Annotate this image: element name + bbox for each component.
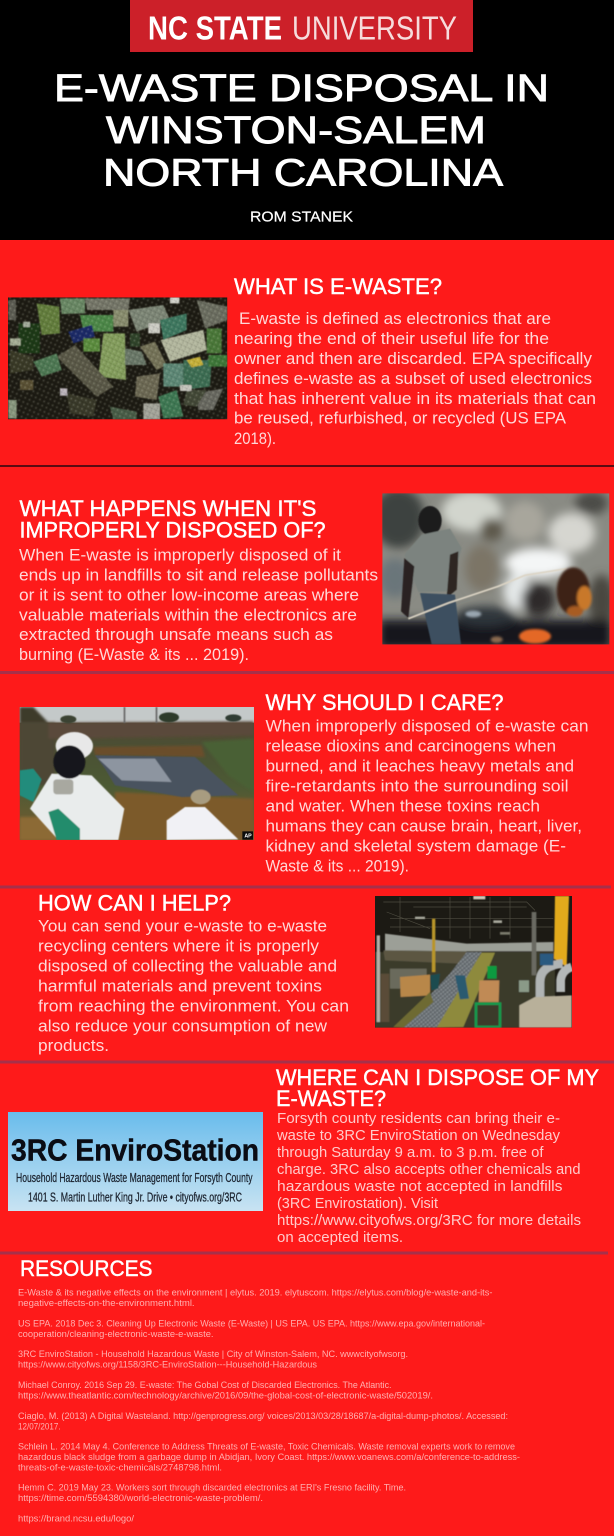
body text: also reduce your consumption of new: [38, 1018, 327, 1036]
body text: nearing the end of their useful life for the: [234, 330, 549, 348]
reference list: https://www.cityofws.org/1158/3RC-EnviroStation---Household-Hazardous: [18, 1358, 317, 1370]
body text: and water. When these toxins reach: [266, 798, 540, 816]
body text: humans they can cause brain, heart, liver,: [266, 818, 582, 836]
reference list: threats-of-e-waste-toxic-chemicals/2748798.html.: [18, 1462, 222, 1472]
body text: Forsyth county residents can bring their e-: [277, 1110, 560, 1127]
body text: that has inherent value in its materials that can: [234, 390, 596, 408]
panel: improper disposal: [19, 488, 614, 664]
logo: NC State University: UNIVERSITY: [292, 10, 457, 46]
panel: what is e-waste: [8, 274, 596, 448]
body text: You can send your e-waste to e-waste: [38, 918, 327, 936]
heading: WHERE CAN I DISPOSE OF MY: [276, 1065, 599, 1090]
image: 3RC EnviroStation sign: 3RC EnviroStation: [11, 1132, 259, 1168]
image: 3RC EnviroStation sign: Household Hazardous Waste Management for Forsyth County: [16, 1171, 253, 1185]
photo: workers in protective suits by polluted pond: [20, 707, 254, 840]
body text: charge. 3RC also accepts other chemicals and: [277, 1161, 580, 1178]
body text: ends up in landfills to sit and release pollutants: [19, 567, 378, 585]
panel: how can I help: [38, 891, 572, 1055]
panel: why should I care: [20, 690, 588, 876]
body text: be reused, refurbished, or recycled (US EPA: [234, 410, 566, 428]
body text: https://www.cityofws.org/3RC for more details: [277, 1212, 581, 1229]
body text: or it is sent to other low-income areas where: [19, 586, 359, 604]
body text: disposed of collecting the valuable and: [38, 958, 337, 976]
heading: WHAT IS E-WASTE?: [234, 274, 442, 299]
image: 3RC EnviroStation sign: [8, 1112, 263, 1211]
body text: release dioxins and carcinogens when: [266, 738, 556, 756]
reference list: Schlein L. 2014 May 4. Conference to Address Threats of E-waste, Toxic Chemicals. Waste removal experts work to remove: [18, 1440, 515, 1452]
body text: through Saturday 9 a.m. to 3 p.m. free of: [277, 1144, 544, 1161]
body text: [234, 310, 596, 448]
body text: burning (E-Waste & its ... 2019).: [19, 646, 249, 664]
body text: defines e-waste as a subset of used electronics: [234, 370, 592, 388]
reference list: 12/07/2017.: [18, 1420, 61, 1432]
body text: waste to 3RC EnviroStation on Wednesday: [276, 1127, 560, 1144]
body text: harmful materials and prevent toxins: [38, 978, 322, 996]
heading: [276, 1065, 599, 1111]
reference list: negative-effects-on-the-environment.html.: [18, 1297, 195, 1308]
heading: RESOURCES: [20, 1256, 152, 1281]
title: WINSTON-SALEM: [106, 110, 486, 152]
body text: valuable materials within the electronics are: [19, 606, 357, 624]
body text: (3RC Envirostation). Visit: [277, 1195, 439, 1212]
body text: When E-waste is improperly disposed of it: [19, 547, 341, 565]
image: 3RC EnviroStation sign: 1401 S. Martin Luther King Jr. Drive • cityofws.org/3RC: [28, 1190, 242, 1204]
body text: [276, 1110, 581, 1246]
heading: IMPROPERLY DISPOSED OF?: [20, 518, 326, 542]
photo: man burning e-waste in smoke: [382, 493, 610, 644]
body text: kidney and skeletal system damage (E-: [266, 838, 566, 856]
body text: When improperly disposed of e-waste can: [266, 718, 588, 736]
reference list: Ciaglo, M. (2013) A Digital Wasteland. http://genprogress.org/ voices/2013/03/28/18687/a-digital-dump-photos/. Accessed:: [18, 1410, 508, 1421]
photo: recycling facility conveyor: [375, 896, 572, 1028]
logo: NC State University: NC STATE: [148, 10, 282, 46]
body text: E-waste is defined as electronics that are: [239, 310, 551, 328]
heading: WHY SHOULD I CARE?: [266, 690, 504, 715]
reference list: Michael Conroy. 2016 Sep 29. E-waste: The Gobal Cost of Discarded Electronics. The Atlantic.: [18, 1379, 392, 1390]
title: NORTH CAROLINA: [103, 152, 504, 194]
body text: Waste & its ... 2019).: [266, 858, 409, 876]
photo: pile of circuit boards: [8, 297, 227, 419]
reference list: https://www.theatlantic.com/technology/archive/2016/09/the-global-cost-of-electronic-waste/502019/.: [18, 1390, 433, 1400]
body text: fire-retardants into the surrounding soil: [266, 778, 568, 796]
reference list: US EPA. 2018 Dec 3. Cleaning Up Electronic Waste (E-Waste) | US EPA. US EPA. https://www.epa.gov/international-: [18, 1318, 485, 1328]
body text: burned, and it leaches heavy metals and: [266, 758, 574, 776]
reference list: Hemm C. 2019 May 23. Workers sort through discarded electronics at ERI's Fresno facility. Time.: [18, 1482, 406, 1492]
body text: from reaching the environment. You can: [38, 998, 349, 1016]
title: E-WASTE DISPOSAL IN: [54, 68, 549, 110]
panel: resources: [18, 1256, 520, 1524]
heading: [20, 496, 326, 542]
body text: owner and then are discarded. EPA specifically: [234, 350, 593, 368]
heading: HOW CAN I HELP?: [38, 891, 231, 916]
reference list: hazardous black sludge from a garbage dump in Abidjan, Ivory Coast. https://www.voanews.com/a/conference-to-address-: [18, 1451, 520, 1462]
reference list: 3RC EnviroStation - Household Hazardous Waste | City of Winston-Salem, NC. wwwcityofwsorg.: [18, 1348, 408, 1359]
reference list: https://brand.ncsu.edu/logo/: [18, 1512, 134, 1524]
reference list: [18, 1286, 520, 1524]
reference list: cooperation/cleaning-electronic-waste-e-waste.: [18, 1328, 214, 1339]
logo: NC State University: [130, 0, 473, 52]
title: [54, 68, 549, 194]
body text: hazardous waste not accepted in landfills: [277, 1178, 562, 1195]
reference list: E-Waste & its negative effects on the environment | elytus. 2019. elytuscom. https://elytus.com/blog/e-waste-and-its-: [18, 1286, 492, 1298]
body text: on accepted items.: [277, 1229, 403, 1246]
heading: E-WASTE?: [276, 1086, 386, 1111]
panel: header: [0, 0, 614, 240]
body text: [266, 718, 588, 876]
photo: workers in protective suits by polluted pond: AP: [244, 833, 252, 839]
body text: extracted through unsafe means such as: [19, 626, 333, 644]
panel: where to dispose: [8, 1065, 599, 1246]
body text: [38, 918, 349, 1055]
body text: products.: [38, 1037, 109, 1055]
reference list: https://time.com/5594380/world-electronic-waste-problem/.: [18, 1492, 263, 1503]
heading: WHAT HAPPENS WHEN IT'S: [20, 496, 316, 521]
body text: recycling centers where it is properly: [38, 938, 320, 956]
body text: [19, 547, 378, 664]
author: ROM STANEK: [250, 208, 353, 226]
body text: 2018).: [234, 430, 276, 448]
